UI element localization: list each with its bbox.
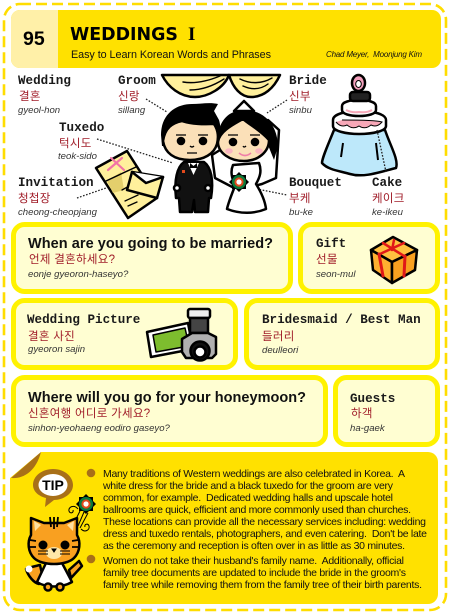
vocabulary: bride: sinbu — [289, 105, 313, 116]
panel: bridesmaid best man: Bridesmaid / Best Man — [262, 313, 421, 327]
icon: invitation and envelope — [96, 151, 163, 218]
panel: gift: seon-mul — [316, 269, 356, 280]
panel: when are you going to be married — [14, 224, 290, 292]
bride dress — [227, 163, 266, 213]
vocabulary: wedding: 결혼 — [19, 90, 41, 103]
bride face — [218, 119, 269, 161]
panel: where will you go: 신혼여행 어디로 가세요? — [28, 407, 150, 420]
panel: guests: 하객 — [351, 406, 373, 420]
icon: bride — [212, 101, 279, 213]
panel: gift: Gift — [316, 237, 346, 251]
tip text: as the ceremony and reception is often over in as little as 30 minutes. — [103, 540, 405, 552]
vocabulary: groom — [118, 74, 156, 116]
panel: wedding picture: gyeoron sajin — [28, 344, 85, 355]
vocabulary: bouquet: bu-ke — [289, 207, 313, 218]
vocabulary: bride: Bride — [289, 74, 327, 88]
panel: guests: Guests — [350, 392, 395, 406]
vocabulary: invitation: 청첩장 — [18, 192, 51, 205]
groom body — [175, 162, 212, 212]
header banner — [11, 10, 441, 68]
vocabulary: bouquet: 부케 — [289, 192, 311, 205]
groom head — [161, 103, 221, 146]
panel: guests: ha-gaek — [350, 423, 386, 434]
icon: flower — [69, 494, 96, 531]
vocabulary: wedding: gyeol-hon — [18, 105, 60, 116]
tip speech bubble: TIP — [42, 477, 64, 493]
vocabulary: bouquet — [289, 176, 342, 218]
icon: cat mascot — [26, 517, 82, 590]
tip text: Women do not take their husband's family name. Additionally, official — [103, 555, 404, 567]
vocabulary: tuxedo — [58, 121, 104, 162]
tip speech bubble — [33, 469, 73, 507]
tip text — [102, 468, 427, 591]
vocabulary: invitation: Invitation — [18, 176, 94, 190]
panel: where will you go: Where will you go for your honeymoon? — [28, 390, 306, 406]
panel: gift — [300, 224, 438, 292]
tip text: white dress for the bride and a black tuxedo for the groom are very — [102, 480, 394, 492]
panel: guests — [336, 378, 438, 444]
icon: camera and photo — [147, 309, 216, 360]
vocabulary: invitation — [18, 176, 98, 218]
bride hair and tiara — [218, 110, 278, 160]
subtitle: Easy to Learn Korean Words and Phrases — [71, 49, 272, 61]
vocabulary: cake: Cake — [372, 176, 402, 190]
tip text: family tree while removing them from the family tree of their birth parents. — [103, 579, 422, 591]
icon: curtain swag — [162, 75, 280, 97]
vocabulary: bride: 신부 — [289, 90, 311, 103]
page fold — [11, 452, 41, 478]
vocabulary: invitation: cheong-cheopjang — [18, 207, 98, 218]
panel: wedding picture: 결혼 사진 — [28, 330, 75, 343]
vocabulary: bouquet: Bouquet — [289, 176, 342, 190]
vocabulary: bride — [289, 74, 327, 116]
vocabulary: wedding — [18, 74, 71, 116]
panel: tip — [10, 452, 438, 604]
panel: wedding picture: Wedding Picture — [27, 313, 140, 327]
tip text: dress and tuxedo rentals, photographers, and even catering. Don't be late — [103, 528, 427, 540]
tip text: These locations can provide all the necessary services including: wedding — [103, 516, 426, 528]
icon: gift box — [371, 237, 417, 283]
vocabulary: tuxedo: teok-sido — [58, 151, 98, 162]
bride veil — [212, 120, 279, 190]
vocabulary: cake: ke-ikeu — [372, 207, 404, 218]
panel: where will you go — [14, 378, 326, 444]
panel: bridesmaid best man: deulleori — [262, 345, 299, 356]
vocabulary: groom: sillang — [118, 105, 146, 116]
tip bullet one — [87, 469, 95, 477]
title numeral: I — [188, 24, 195, 45]
vocabulary: tuxedo: 턱시도 — [59, 137, 92, 150]
panel: when are you going to be married: 언제 결혼하세요? — [29, 252, 115, 266]
dotted leader lines — [77, 99, 287, 198]
panel: when are you going to be married: When are you going to be married? — [28, 236, 273, 252]
vocabulary: cake: 케이크 — [372, 192, 405, 205]
icon: groom — [161, 103, 221, 212]
vocabulary: cake — [372, 176, 405, 218]
lesson number panel — [11, 10, 58, 68]
tip text: ballrooms are quick, efficient and more commonly used than churches. — [103, 504, 411, 516]
vocabulary: groom: 신랑 — [118, 90, 140, 103]
panel: bridesmaid best man: 들러리 — [262, 330, 295, 343]
tip text: Many traditions of Western weddings are also celebrated in Korea. A — [103, 468, 405, 480]
vocabulary: groom: Groom — [118, 74, 156, 88]
title: WEDDINGS — [70, 24, 178, 45]
panel: bridesmaid best man — [246, 300, 438, 368]
panel: where will you go: sinhon-yeohaeng eodiro gaseyo? — [28, 423, 171, 434]
tip bullet two — [87, 555, 95, 563]
panel: gift: 선물 — [316, 253, 338, 266]
lesson number: 95 — [23, 28, 45, 50]
panel: wedding picture — [14, 300, 236, 368]
authors: Chad Meyer, Moonjung Kim — [326, 50, 422, 59]
tip text: family tree documents are updated to include the bride in the groom's — [103, 567, 406, 579]
bouquet — [229, 172, 249, 192]
panel: when are you going to be married: eonje gyeoron-haseyo? — [28, 269, 129, 280]
icon: wedding cake — [322, 75, 397, 175]
vocabulary: wedding: Wedding — [18, 74, 71, 88]
vocabulary: tuxedo: Tuxedo — [59, 121, 104, 135]
tip text: common, for example. Dedicated wedding halls and upscale hotel — [103, 492, 393, 504]
